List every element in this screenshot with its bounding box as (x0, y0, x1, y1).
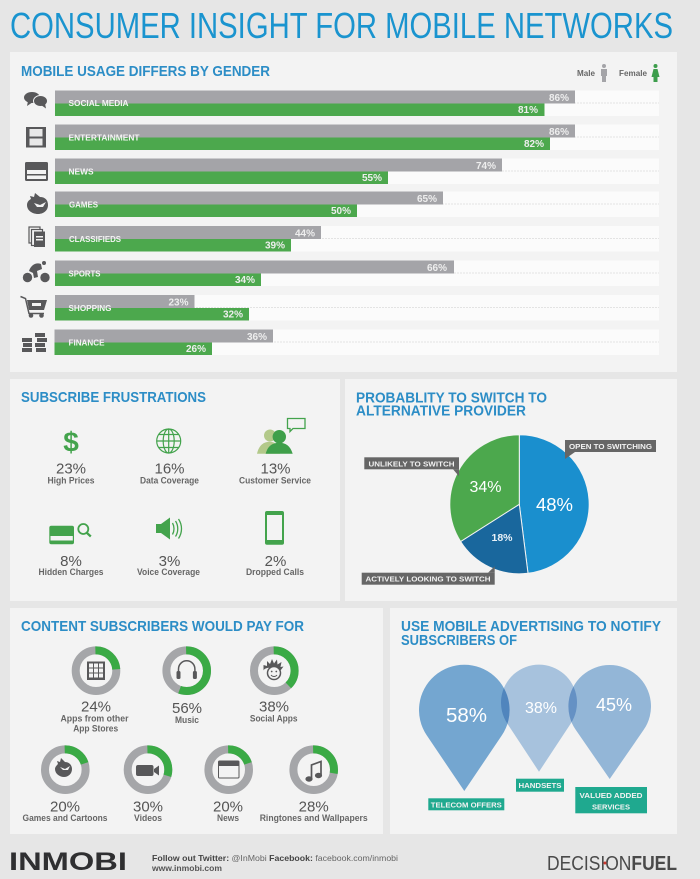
bar row: sports: SPORTS (68, 270, 101, 278)
stat: games: Games and Cartoons (22, 813, 108, 823)
stat: music: 56% (172, 700, 202, 717)
icon: smartphone (265, 511, 284, 545)
label: telecom offers (428, 798, 504, 810)
pie chart (450, 435, 589, 574)
bar row: finance: 26% (186, 344, 206, 355)
icon: film strip (26, 127, 46, 148)
stat: videos: 30% (133, 799, 163, 816)
bar row: finance: 36% (247, 332, 267, 343)
label: telecom offers: TELECOM OFFERS (431, 800, 502, 809)
icon: shopping cart (20, 296, 47, 318)
stat: customer service: 13% (260, 460, 291, 478)
footer logo: InMobi: INMOBI (9, 848, 127, 876)
icon: cyclist (23, 261, 50, 282)
stat: ringtones: 28% (299, 799, 329, 816)
bar row: sports: 34% (235, 275, 255, 286)
stat: music (172, 700, 202, 725)
stat: customer service (239, 460, 311, 486)
icon: finance stacks (22, 333, 47, 352)
panel: content subscribers would pay for (10, 608, 383, 834)
stat: dropped calls (246, 553, 304, 577)
stat: social apps: 38% (259, 699, 289, 716)
bar row: social media: 81% (518, 105, 538, 116)
bar row: classifieds: CLASSIFIEDS (69, 235, 122, 244)
stat: data coverage: 16% (154, 460, 185, 478)
stat: apps: Apps from other (60, 714, 129, 724)
bar row: entertainment: 82% (524, 139, 544, 150)
bar row: news (55, 158, 659, 184)
stat: apps: App Stores (73, 724, 118, 734)
footer logo: DecisionFuel: DECISIONFUEL (547, 853, 677, 875)
stat: customer service: Customer Service (239, 476, 311, 486)
label: open to switching (565, 440, 656, 459)
label: actively looking: ACTIVELY LOOKING TO SWITCH (366, 575, 490, 584)
footer text: Follow out Twitter: @InMobi Facebook: facebook.com/inmobi (152, 853, 398, 863)
bar row: shopping: 32% (223, 310, 243, 320)
stat: apps: 24% (81, 699, 111, 716)
donut: news (208, 749, 249, 790)
stat: voice coverage: Voice Coverage (137, 567, 200, 577)
bar row: classifieds (55, 226, 659, 252)
stat: ringtones: Ringtones and Wallpapers (260, 813, 368, 823)
bar row: social media: 86% (549, 93, 569, 104)
stat: apps (60, 699, 129, 734)
bar row: social media (55, 90, 659, 116)
stat: hidden charges (38, 553, 104, 577)
bar row: sports: 66% (427, 263, 447, 274)
stat: voice coverage (137, 553, 200, 577)
bar row: games: 50% (331, 206, 351, 217)
icon: angry bird (27, 193, 48, 214)
label: unlikely to switch (364, 457, 459, 476)
stat: voice coverage: 3% (159, 553, 180, 570)
stat: ringtones (260, 799, 368, 823)
stat: social apps: Social Apps (250, 714, 298, 724)
stat: news (213, 799, 243, 823)
donut: music (166, 650, 207, 691)
bar row: shopping (55, 295, 659, 320)
bar row: games: 65% (417, 194, 437, 205)
pin: telecom offers (419, 665, 510, 791)
pie chart: 18% (491, 532, 513, 544)
label: open to switching: OPEN TO SWITCHING (569, 442, 652, 451)
donut: ringtones (293, 749, 334, 790)
pin values: 38% (525, 700, 557, 717)
heading: mobile usage: MOBILE USAGE DIFFERS BY GENDER (21, 63, 270, 80)
stat: high prices: 23% (56, 460, 86, 478)
label: valued added services (575, 787, 647, 813)
pin: valued added services (568, 665, 651, 779)
label: valued added services: SERVICES (592, 802, 630, 812)
stat: games (22, 799, 108, 823)
heading: probability: PROBABLITY TO SWITCH TO (356, 390, 547, 406)
donut: social apps (254, 650, 295, 691)
icon: speaker (156, 518, 182, 540)
panel: mobile advertising (390, 608, 677, 834)
bar row: classifieds: 39% (265, 240, 285, 252)
pin values: 45% (596, 695, 632, 715)
icon: news window (25, 162, 48, 181)
icon: customer service (257, 418, 305, 454)
pie chart: 34% (469, 479, 502, 496)
donut: games (45, 749, 86, 790)
donut: apps (76, 650, 116, 691)
heading: advertising: SUBSCRIBERS OF (401, 632, 517, 649)
stat: social apps (250, 699, 298, 724)
heading: probability: ALTERNATIVE PROVIDER (356, 402, 526, 420)
pin: handsets (501, 665, 577, 772)
stat: news: News (217, 813, 239, 823)
bar row: games (55, 192, 659, 217)
stat: dropped calls: Dropped Calls (246, 567, 304, 577)
bar row: news: 55% (362, 173, 382, 184)
bar row: finance: FINANCE (68, 338, 105, 348)
bar row: sports (55, 260, 659, 286)
label: handsets: HANDSETS (518, 781, 562, 790)
stat: games: 20% (50, 799, 80, 816)
heading: frustrations: SUBSCRIBE FRUSTRATIONS (21, 389, 206, 406)
heading: advertising: USE MOBILE ADVERTISING TO NOTIFY (401, 618, 661, 635)
stat: high prices: High Prices (48, 476, 94, 486)
footer text: www.inmobi.com (151, 863, 222, 873)
panel: mobile usage by gender (10, 52, 677, 372)
icon: classified pages (29, 227, 45, 247)
stat: music: Music (175, 715, 199, 725)
label: valued added services: VALUED ADDED (580, 791, 643, 800)
pin values (446, 695, 632, 727)
stat: videos (133, 799, 163, 823)
bar row: classifieds: 44% (295, 228, 315, 240)
bar row: entertainment: ENTERTAINMENT (68, 134, 140, 142)
icon: card and magnifier (49, 524, 91, 544)
heading: content: CONTENT SUBSCRIBERS WOULD PAY FOR (21, 618, 304, 635)
icon: globe (157, 429, 181, 453)
bar row: shopping: 23% (168, 298, 189, 308)
panel: probability to switch (345, 379, 677, 601)
pin values: 58% (446, 704, 487, 727)
label: handsets (516, 779, 564, 792)
stat: data coverage: Data Coverage (140, 476, 199, 486)
bar row: news: NEWS (68, 168, 94, 176)
stat: dropped calls: 2% (265, 553, 286, 570)
bar row: social media: SOCIAL MEDIA (68, 99, 129, 108)
stat: videos: Videos (134, 813, 162, 823)
stat: high prices (48, 460, 94, 486)
label: unlikely to switch: UNLIKELY TO SWITCH (368, 459, 454, 468)
pie chart: 48% (536, 494, 573, 515)
bar row: entertainment (55, 124, 659, 150)
bar row: news: 74% (476, 161, 496, 172)
icon: speech bubbles (24, 92, 48, 108)
stat: hidden charges: 8% (60, 553, 82, 570)
stat: news: 20% (213, 799, 243, 816)
donut: videos (128, 749, 168, 790)
label: actively looking (362, 566, 495, 585)
footer text (151, 853, 398, 873)
bar row: shopping: SHOPPING (68, 304, 112, 313)
legend (577, 64, 660, 82)
legend: Female (619, 69, 648, 78)
stat: data coverage (140, 460, 199, 486)
bar row: finance (54, 330, 659, 355)
icon: dollar: $ (63, 426, 79, 458)
heading: probability (356, 390, 547, 420)
stat: hidden charges: Hidden Charges (38, 567, 104, 577)
bar row: games: GAMES (69, 200, 99, 210)
panel: subscribe frustrations (10, 379, 340, 601)
heading: advertising (401, 618, 661, 649)
legend: Male (577, 69, 596, 78)
bar row: entertainment: 86% (549, 127, 569, 138)
